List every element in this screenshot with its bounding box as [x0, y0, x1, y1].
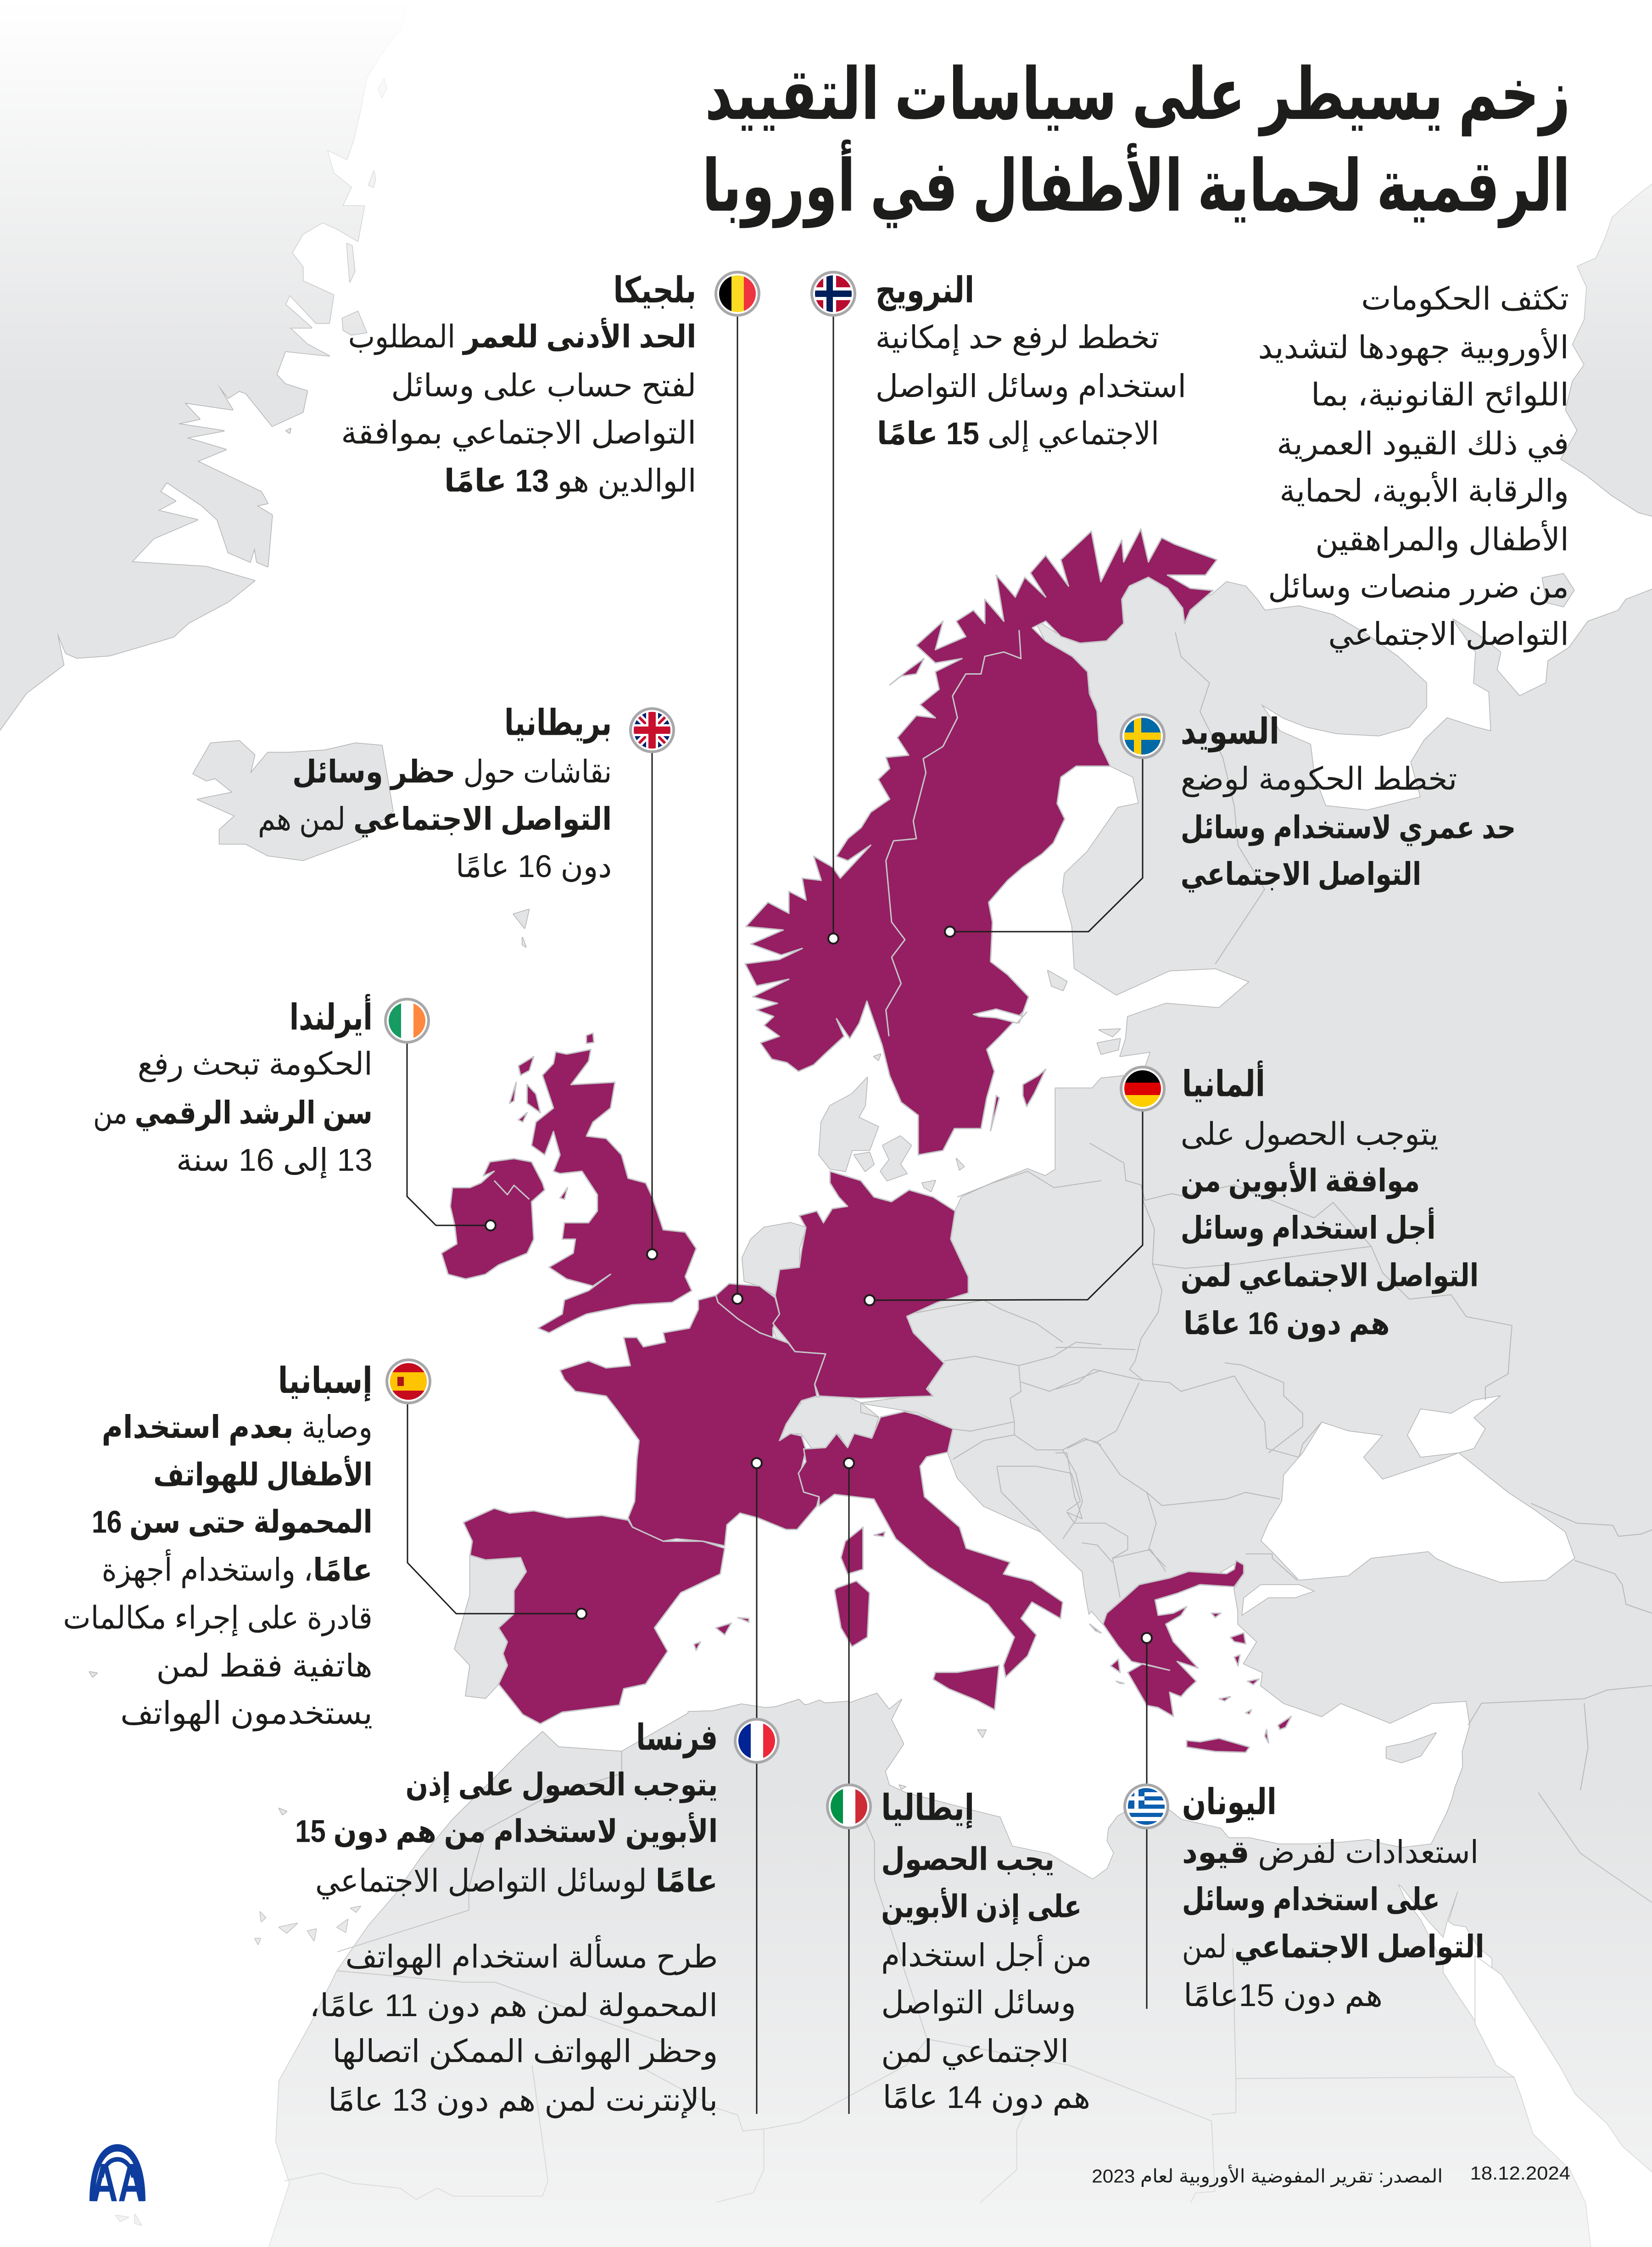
leader: Ireland [407, 1044, 491, 1225]
panel: Italy [881, 1787, 1092, 2116]
body: Spain: يستخدمون الهواتف [120, 1695, 373, 1732]
heading: Sweden: السويد [1181, 711, 1279, 752]
body: United Kingdom [258, 754, 612, 885]
body: Spain: هاتفية فقط لمن [156, 1648, 373, 1684]
leader: France [756, 1463, 757, 2114]
body: Germany: التواصل الاجتماعي لمن [1181, 1258, 1479, 1294]
intro text block: اللوائح القانونية، بما [1311, 377, 1569, 414]
panel: Ireland [93, 994, 373, 1179]
body: Germany [1181, 1117, 1479, 1342]
body: France: المحمولة لمن هم دون 11 عامًا، [309, 1988, 718, 2024]
heading: Belgium: بلجيكا [613, 270, 696, 310]
heading: Italy: إيطاليا [881, 1787, 974, 1829]
icon: Italy flag [827, 1785, 871, 1828]
body: Spain: الأطفال للهواتف [153, 1455, 373, 1493]
panel: Germany [1181, 1061, 1479, 1342]
panel: France [295, 1717, 718, 2118]
body: Sweden [1181, 761, 1516, 893]
body: Greece: هم دون 15عامًا [1183, 1978, 1383, 2014]
panel: Spain [63, 1360, 373, 1732]
body: France: عامًا لوسائل التواصل الاجتماعي [315, 1863, 718, 1899]
leader: Norway [832, 317, 834, 939]
body: Germany: يتوجب الحصول على [1181, 1117, 1439, 1153]
Greece [1090, 1560, 1291, 1752]
Norway and Sweden [745, 529, 1217, 1155]
heading: Norway: النرويج [876, 270, 974, 311]
title [702, 55, 1570, 229]
intro text block: في ذلك القيود العمرية [1277, 426, 1569, 462]
location dots [486, 927, 1152, 1643]
body: France [295, 1767, 718, 2118]
leader: Belgium [737, 317, 738, 1299]
body: Italy [881, 1842, 1092, 2116]
body: Norway: الاجتماعي إلى 15 عامًا [877, 416, 1159, 452]
icon: France flag [735, 1719, 778, 1762]
Spain [463, 1509, 749, 1724]
intro text block: والرقابة الأبوية، لحماية [1279, 471, 1569, 509]
intro text block: من ضرر منصات وسائل [1268, 569, 1569, 605]
France [560, 1295, 826, 1546]
body: Sweden: حد عمري لاستخدام وسائل [1181, 810, 1516, 846]
body: Spain: قادرة على إجراء مكالمات [63, 1600, 373, 1636]
body: France: يتوجب الحصول على إذن [406, 1767, 718, 1803]
source line: المصدر: تقرير المفوضية الأوروبية لعام 2023 [1092, 2164, 1443, 2187]
body: Belgium [341, 318, 696, 499]
intro text block: الأطفال والمراهقين [1315, 520, 1569, 558]
body: Greece: استعدادات لفرض قيود [1182, 1834, 1479, 1871]
intro text block: تكثف الحكومات [1361, 281, 1569, 317]
lake in Sweden [973, 1009, 1027, 1023]
body: Norway: تخطط لرفع حد إمكانية [876, 320, 1159, 356]
body: Belgium: التواصل الاجتماعي بموافقة [341, 415, 696, 451]
icon: United Kingdom flag [631, 709, 674, 752]
intro text block: التواصل الاجتماعي [1328, 616, 1569, 653]
heading: United Kingdom: بريطانيا [504, 703, 612, 744]
body: Spain: عامًا، واستخدام أجهزة [102, 1549, 373, 1588]
icon: Greece flag [1125, 1785, 1168, 1828]
body: Italy: وسائل التواصل [881, 1985, 1076, 2021]
panel: Belgium [341, 270, 696, 499]
body: Italy: هم دون 14 عامًا [882, 2079, 1090, 2116]
heading: Ireland: أيرلندا [290, 994, 373, 1038]
country borders on the base map [285, 632, 1652, 2203]
logo: Anadolu Agency AA [89, 2144, 145, 2213]
icon: Norway flag [812, 272, 855, 315]
body: United Kingdom: دون 16 عامًا [456, 849, 612, 885]
body: Spain: وصاية بعدم استخدام [102, 1409, 373, 1446]
leader: Sweden [950, 759, 1143, 932]
body: Italy: يجب الحصول [881, 1842, 1055, 1878]
body: Greece: على استخدام وسائل [1182, 1882, 1440, 1918]
body: Belgium: الوالدين هو 13 عامًا [444, 463, 696, 499]
body: Sweden: التواصل الاجتماعي [1181, 856, 1421, 893]
body: Ireland: سن الرشد الرقمي من [93, 1095, 373, 1131]
body: Germany: هم دون 16 عامًا [1183, 1306, 1390, 1342]
body: Greece: التواصل الاجتماعي لمن [1182, 1929, 1485, 1965]
panel: Sweden [1181, 711, 1516, 893]
intro text block [1258, 281, 1569, 653]
body: Spain: المحمولة حتى سن 16 [92, 1504, 373, 1540]
icon: Spain flag [387, 1360, 430, 1403]
seas cut out of the base map [1242, 1396, 1652, 2247]
flag icons [385, 272, 1168, 1828]
body: Spain [63, 1409, 373, 1732]
body: Sweden: تخطط الحكومة لوضع [1181, 761, 1457, 797]
body: United Kingdom: التواصل الاجتماعي لمن هم [258, 801, 612, 838]
leader: Spain [407, 1404, 581, 1614]
body: Ireland: الحكومة تبحث رفع [138, 1046, 373, 1083]
body: Norway [876, 320, 1186, 452]
leader: Greece [1146, 1638, 1147, 2009]
Ireland [441, 1158, 545, 1279]
heading: Greece: اليونان [1182, 1782, 1277, 1823]
body: Italy: من أجل استخدام [881, 1934, 1092, 1974]
body: Greece [1182, 1834, 1485, 2014]
leader: Germany [870, 1112, 1143, 1300]
body: France: طرح مسألة استخدام الهواتف [345, 1935, 718, 1975]
body: Belgium: لفتح حساب على وسائل [391, 368, 696, 404]
panel: Norway [876, 270, 1186, 452]
icon: Belgium flag [716, 272, 759, 315]
icon: Germany flag [1121, 1067, 1164, 1110]
body: Germany: أجل استخدام وسائل [1181, 1207, 1436, 1246]
body: France: وحظر الهواتف الممكن اتصالها [332, 2034, 718, 2070]
icon: Ireland flag [385, 999, 429, 1042]
fade of the map at the top [0, 0, 1652, 390]
body: Ireland: 13 إلى 16 سنة [176, 1142, 373, 1179]
date: 18.12.2024 [1470, 2163, 1570, 2184]
body: Norway: استخدام وسائل التواصل [876, 369, 1186, 405]
logo: Anadolu Agency AA: AA [91, 2152, 145, 2213]
panel: Greece [1182, 1782, 1485, 2014]
leader: Italy [848, 1463, 850, 2114]
heading: Spain: إسبانيا [278, 1360, 373, 1402]
intro text block: الأوروبية جهودها لتشديد [1258, 328, 1569, 366]
Italy [798, 1412, 1063, 1710]
Germany [773, 1171, 968, 1398]
United Kingdom [509, 1033, 696, 1333]
body: Ireland [93, 1046, 373, 1179]
body: Italy: على إذن الأبوين [881, 1888, 1082, 1925]
heading: France: فرنسا [636, 1717, 718, 1758]
icon: Sweden flag [1121, 715, 1164, 758]
highlighted countries [441, 529, 1291, 1752]
body: Germany: موافقة الأبوين من [1181, 1162, 1420, 1199]
fade of the map at the bottom [0, 1790, 1652, 2247]
Belgium [716, 1284, 780, 1337]
leader lines and location dots [407, 317, 1152, 2114]
Western Europe countries [441, 1033, 1063, 1724]
body: France: الأبوين لاستخدام من هم دون 15 [295, 1812, 718, 1850]
leader: United Kingdom [652, 753, 653, 1254]
body: France: بالإنترنت لمن هم دون 13 عامًا [328, 2082, 718, 2118]
panel: United Kingdom [258, 703, 612, 885]
heading: Germany: ألمانيا [1182, 1061, 1265, 1104]
body: Italy: الاجتماعي لمن [881, 2034, 1069, 2070]
body: United Kingdom: نقاشات حول حظر وسائل [292, 754, 612, 790]
body: Belgium: الحد الأدنى للعمر المطلوب [348, 318, 696, 355]
